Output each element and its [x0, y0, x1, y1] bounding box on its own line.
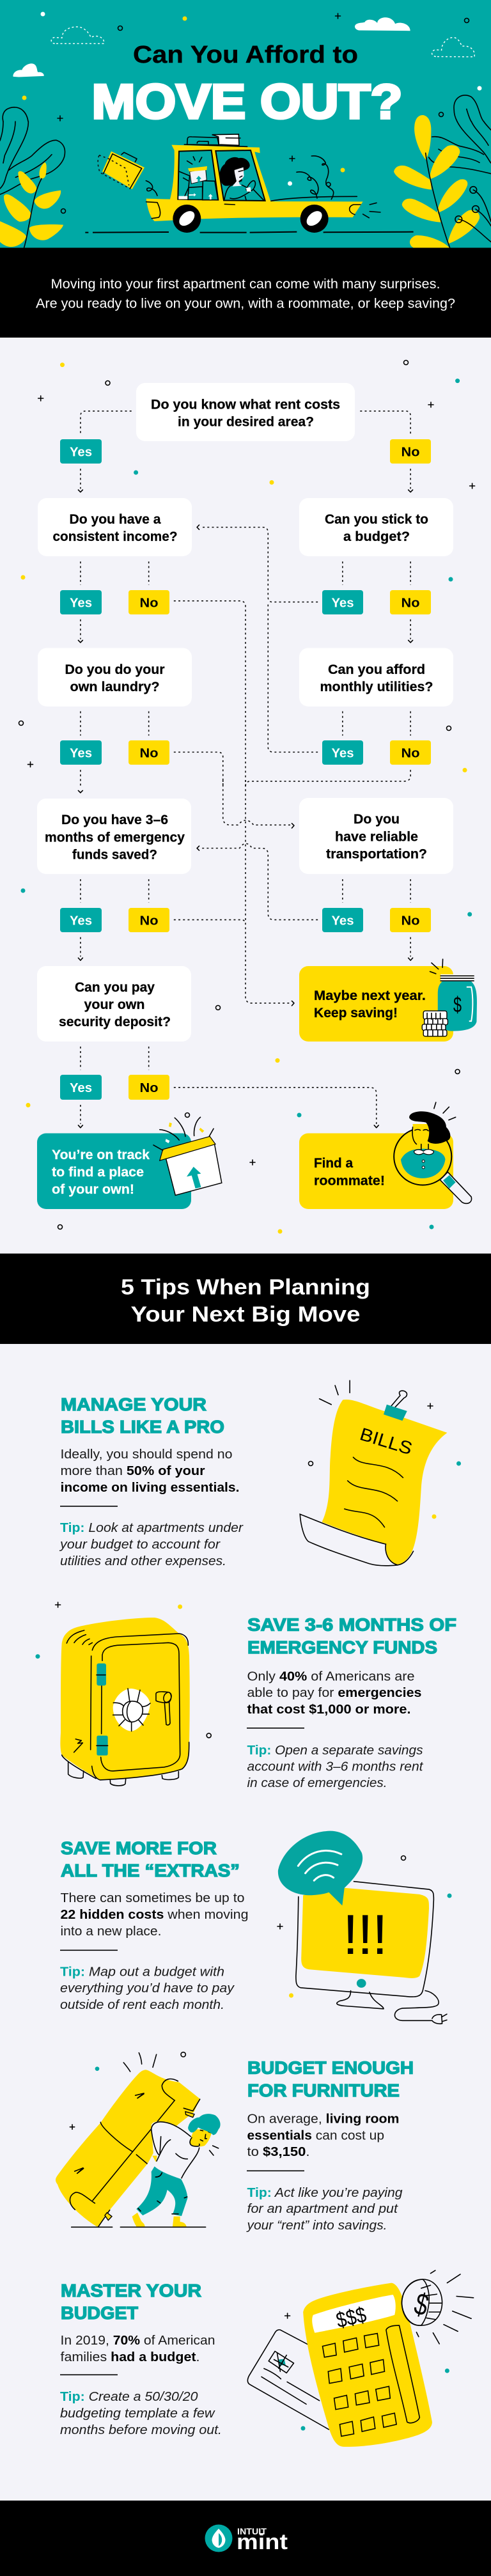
- flow: income question: consistent income?: [52, 529, 178, 544]
- illustration: right plant: [394, 95, 491, 248]
- flow: emergency funds question: [37, 799, 191, 874]
- flow: utilities question: Can you afford: [328, 662, 425, 677]
- flow: emergency funds question: Do you have 3–6: [61, 813, 168, 827]
- flow: deposit question: Can you pay: [75, 980, 155, 995]
- body: [247, 2111, 399, 2159]
- illustration: yellow car: [146, 134, 380, 233]
- tip: for an apartment and put: [247, 2201, 398, 2216]
- panel: tips heading band: [0, 1254, 491, 1344]
- flow outcome: on track: of your own!: [52, 1182, 134, 1197]
- flow: emergency funds question: months of emergency: [45, 830, 185, 845]
- flow: deposit question: security deposit?: [59, 1015, 171, 1029]
- panel: tip 4 text: [246, 2057, 414, 2233]
- flow: transportation question: [299, 798, 453, 874]
- tip: your “rent” into savings.: [246, 2218, 387, 2233]
- tip 5 marks: [285, 2313, 449, 2431]
- tip: [60, 1964, 235, 2012]
- flow outcome: find a roommate: roommate!: [314, 1174, 385, 1188]
- flow: row 5 answers: No: [139, 1081, 159, 1095]
- heading: SAVE 3-6 MONTHS OF: [247, 1615, 456, 1635]
- flow outcome: keep saving: [299, 959, 477, 1042]
- heading: FOR FURNITURE: [247, 2080, 400, 2100]
- body: Ideally, you should spend no: [60, 1447, 233, 1462]
- flow: laundry question: Do you do your: [65, 662, 165, 677]
- illustration: computer: [278, 1831, 447, 2024]
- panel: header: [0, 0, 491, 248]
- tip 1 marks: [36, 1403, 461, 1738]
- flow: budget question: Can you stick to: [325, 512, 428, 527]
- flow: row 3 answers: Yes: [331, 747, 354, 761]
- tip: [246, 2185, 403, 2233]
- intro text line 2: Are you ready to live on your own, with a roommate, or keep saving?: [36, 297, 455, 311]
- body: [60, 1891, 248, 1939]
- tip: [59, 1520, 244, 1568]
- heading: BUDGET ENOUGH: [247, 2057, 414, 2078]
- logo: wordmark: INTUIT: [237, 2526, 267, 2536]
- flow: row 1 no: [390, 439, 431, 464]
- flow: row 3 answers: Yes: [70, 747, 92, 761]
- heading: SAVE MORE FOR: [61, 1838, 217, 1858]
- panel: tips heading band: 5 Tips When Planning: [121, 1275, 370, 1299]
- heading: MASTER YOUR: [61, 2281, 201, 2300]
- tip 3 marks: [277, 1855, 451, 1997]
- flow outcome: find a roommate: [299, 1102, 472, 1209]
- tip: Tip: Act like you’re paying: [247, 2185, 403, 2200]
- flow: budget question: a budget?: [343, 529, 410, 544]
- flow: row 2 answers: Yes: [70, 596, 92, 610]
- illustration: flying suitcase: [98, 152, 157, 196]
- illustration: person pushing couch: [56, 2052, 221, 2227]
- flow: utilities question: monthly utilities?: [320, 680, 433, 694]
- body: Only 40% of Americans are: [247, 1669, 414, 1684]
- flow: rent question: in your desired area?: [178, 415, 314, 430]
- tip: months before moving out.: [60, 2423, 222, 2437]
- tip: Tip: Map out a budget with: [60, 1964, 224, 1979]
- panel: tip 3 text: [60, 1838, 248, 2012]
- body: into a new place.: [60, 1924, 161, 1939]
- computer exclamation marks: !!!: [343, 1903, 387, 1966]
- illustration: safe: [60, 1618, 190, 1786]
- tip: Tip: Look at apartments under: [60, 1520, 244, 1535]
- body: families had a budget .: [60, 2350, 199, 2364]
- flow: row 5 answers: [60, 1075, 169, 1100]
- heading: [247, 2057, 414, 2100]
- body: In 2019, 70% of American: [60, 2333, 215, 2348]
- heading: ALL THE “EXTRAS”: [61, 1861, 240, 1880]
- body: There can sometimes be up to: [60, 1891, 244, 1905]
- heading: EMERGENCY FUNDS: [247, 1637, 437, 1657]
- body: [60, 1447, 239, 1495]
- flow outcome: keep saving: Keep saving!: [314, 1006, 398, 1020]
- body: to $3,150.: [247, 2144, 309, 2159]
- heading: [61, 1394, 224, 1437]
- illustration: left plant: [0, 107, 65, 248]
- flow: transportation question: Do you: [354, 812, 400, 827]
- flow: budget question: [299, 498, 453, 556]
- body: income on living essentials.: [60, 1480, 239, 1495]
- flow: row 1 yes: [60, 439, 102, 464]
- illustration: bills: [300, 1380, 447, 1566]
- dots and marks: [22, 12, 482, 214]
- panel: footer: [0, 2501, 491, 2576]
- logo: mint leaf: [205, 2524, 233, 2552]
- flow: rent question: Do you know what rent costs: [151, 397, 340, 412]
- heading: [61, 1838, 240, 1880]
- flow: row 4 answers: No: [139, 914, 159, 928]
- flowchart connectors: upper: [78, 411, 413, 786]
- intro text: Moving into your first apartment can come with many surprises.: [51, 277, 440, 292]
- flow: deposit question: your own: [84, 997, 144, 1012]
- flow: utilities question: [299, 648, 453, 706]
- body: On average, living room: [247, 2111, 399, 2127]
- panel: tip 1 text: [59, 1394, 244, 1568]
- flow outcome: keep saving: Maybe next year.: [314, 988, 426, 1003]
- tip: outside of rent each month.: [60, 1997, 224, 2012]
- flow outcome: on track: to find a place: [52, 1165, 144, 1180]
- icon: open box: [153, 1117, 222, 1195]
- flow: row 1 yes: Yes: [70, 445, 92, 459]
- heading: BUDGET: [61, 2303, 138, 2323]
- flow: deposit question: [37, 966, 191, 1042]
- panel: tip 5 text: [60, 2281, 222, 2437]
- flow: rent question: [136, 383, 355, 441]
- icon: magnifier and person: [394, 1102, 472, 1203]
- illustration: road: [85, 231, 414, 233]
- tip: Tip: Create a 50/30/20: [60, 2389, 198, 2404]
- flow: row 3 answers: No: [139, 747, 159, 761]
- icon: coin stack: [422, 1011, 448, 1036]
- flowchart background dots: [19, 361, 475, 1234]
- body: [60, 2333, 215, 2364]
- flow: row 2 answers: [60, 590, 431, 614]
- flow: income question: [38, 498, 192, 556]
- panel: tip 2 text: [247, 1615, 456, 1790]
- tip: in case of emergencies.: [247, 1776, 387, 1790]
- tip: [247, 1743, 424, 1790]
- body: able to pay for emergencies: [247, 1685, 422, 1700]
- flow: emergency funds question: funds saved?: [72, 848, 157, 863]
- flow outcome: find a roommate: Find a: [314, 1156, 353, 1171]
- flow: row 2 answers: Yes: [331, 596, 354, 610]
- flow: row 5 answers: Yes: [70, 1081, 92, 1095]
- flow outcome: on track: [37, 1117, 222, 1209]
- coin dollar sign: $: [410, 2287, 432, 2323]
- flow: transportation question: transportation?: [326, 847, 427, 862]
- flow outcome: on track: You’re on track: [52, 1148, 150, 1162]
- jar dollar sign: $: [453, 993, 462, 1017]
- flow: row 4 answers: Yes: [331, 914, 354, 928]
- flow: transportation question: have reliable: [335, 830, 418, 844]
- flow: laundry question: own laundry?: [70, 680, 160, 694]
- body: that cost $1,000 or more.: [247, 1702, 410, 1717]
- flow: row 3 answers: [60, 740, 431, 765]
- calculator display symbols: $$$: [334, 2302, 369, 2333]
- heading: [247, 1615, 456, 1657]
- flow: row 2 answers: No: [139, 596, 159, 610]
- bills label: BILLS: [357, 1424, 415, 1458]
- icon: savings jar: [430, 959, 477, 1031]
- tip: budgeting template a few: [60, 2406, 215, 2421]
- logo: wordmark: mint: [237, 2530, 288, 2554]
- heading: [61, 2281, 201, 2323]
- panel: tips heading band: Your Next Big Move: [130, 1302, 361, 1327]
- tip: account with 3–6 months rent: [247, 1760, 424, 1774]
- flow: row 4 answers: Yes: [70, 914, 92, 928]
- flowchart connectors: lower: [78, 780, 413, 1128]
- heading: MANAGE YOUR: [61, 1394, 207, 1414]
- tip: utilities and other expenses.: [60, 1554, 226, 1568]
- body: 22 hidden costs when moving: [60, 1907, 248, 1922]
- tip: everything you’d have to pay: [60, 1981, 235, 1995]
- clouds: [13, 17, 474, 77]
- tip: [60, 2389, 222, 2437]
- tip: Tip: Open a separate savings: [247, 1743, 423, 1758]
- body: [247, 1669, 422, 1717]
- heading: BILLS LIKE A PRO: [61, 1417, 224, 1437]
- title: move out: MOVE OUT?: [92, 75, 403, 129]
- flow: laundry question: [38, 648, 192, 706]
- body: more than 50% of your: [60, 1464, 205, 1478]
- illustration: calculator, card and coin: [247, 2270, 474, 2447]
- flow: row 3 answers: No: [401, 747, 419, 761]
- tip: your budget to account for: [59, 1537, 221, 1552]
- flow: row 4 answers: No: [401, 914, 419, 928]
- flow: row 1 no: No: [401, 445, 419, 459]
- flow: row 2 answers: No: [401, 596, 419, 610]
- flow: row 4 answers: [60, 908, 431, 932]
- flow: income question: Do you have a: [69, 512, 161, 527]
- body: essentials can cost up: [247, 2128, 384, 2143]
- title: Can You Afford to: [133, 42, 358, 68]
- panel: intro band: [0, 248, 491, 338]
